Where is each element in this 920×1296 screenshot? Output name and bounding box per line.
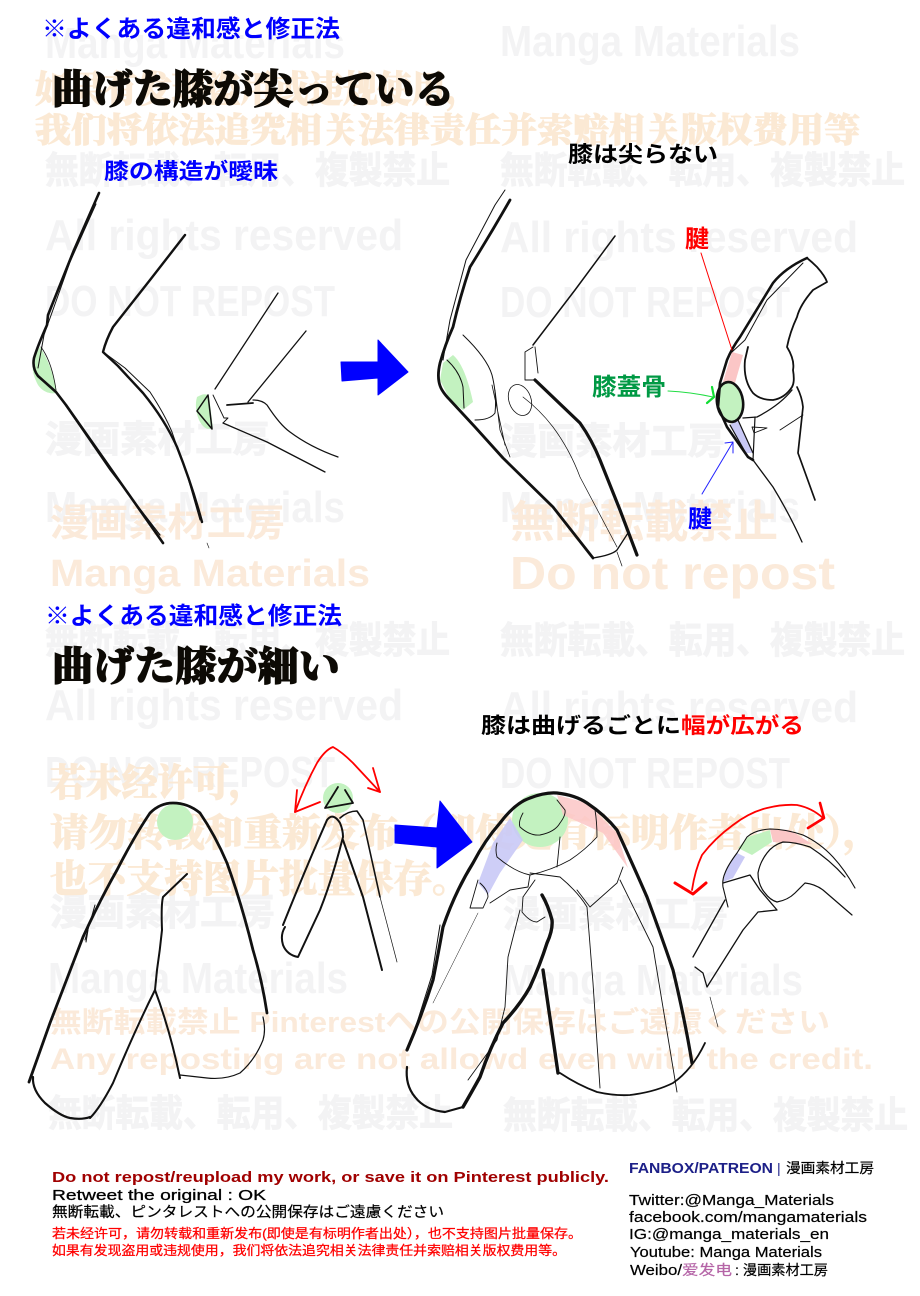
outer contour: [407, 793, 705, 1112]
caption: knee structure vague: 膝の構造が曖昧: [104, 159, 278, 184]
footer: social links: FANBOX/PATREON: [629, 1161, 773, 1177]
inner structure lines: [433, 800, 677, 1092]
footer: social links: |: [777, 1160, 781, 1176]
grey watermark text: 漫画素材工房: [50, 892, 275, 933]
grey watermark text: Manga Materials: [500, 483, 800, 532]
grey watermark text: 漫画素材工房: [500, 421, 725, 462]
tendon lower: [730, 420, 753, 453]
orange watermark text: Do not repost: [510, 547, 835, 599]
orange watermark text: 漫画素材工房: [50, 503, 285, 545]
grey watermark text: Manga Materials: [45, 19, 345, 68]
grey watermark text: All rights reserved: [500, 683, 858, 732]
label: tendon (red): 腱: [685, 226, 709, 253]
sketch: corrected wide knee: [407, 793, 705, 1112]
grey watermark text: Manga Materials: [48, 954, 348, 1003]
grey watermark text: All rights reserved: [45, 681, 403, 730]
sketch: thin bent knee structure: [282, 783, 397, 970]
highlight: tendon red: [557, 795, 628, 868]
caption: knee widens as it bends: 膝は曲げるごとに: [481, 713, 681, 738]
grey watermark text: 無断転載、転用、複製禁止: [48, 1093, 453, 1134]
orange watermark text: 我们将依法追究相关法律责任并索赔相关版权费用等: [35, 112, 860, 150]
orange watermark text: 也不支持图片批量保存。: [50, 859, 470, 901]
footer: repost notice: Do not repost/reupload my work, or save it on Pinterest publicly.: [52, 1169, 609, 1186]
section 2 title: 曲げた膝が細い: [52, 635, 340, 692]
footer: social links: 漫画素材工房: [786, 1160, 874, 1176]
sketch: corrected knee side anatomy: [693, 829, 855, 1027]
grey watermark text: Manga Materials: [500, 17, 800, 66]
sketch: thin bent knee outline: [29, 803, 267, 1119]
grey watermark text: DO NOT REPOST: [45, 277, 335, 326]
label: tendon (blue): 腱: [688, 506, 712, 533]
sketch: corrected knee: [438, 190, 637, 566]
section 1 label: ※よくある違和感と修正法: [42, 16, 340, 43]
footer: social links: facebook.com/mangamaterials: [629, 1209, 867, 1226]
footer: repost notice: 如果有发现盗用或违规使用，我们将依法追究相关法律责任并索赔相关版权费用等。: [52, 1243, 566, 1258]
footer: repost notice: 若未经许可，请勿转载和重新发布(即使是有标明作者出处），也不支持图片批量保存。: [52, 1226, 582, 1241]
orange watermark text: 若未经许可，: [50, 763, 265, 806]
sketch: pointed knee front outline: [33, 193, 163, 543]
arrow: red double curved 1: [295, 747, 380, 812]
orange watermark text: 無断転載禁止: [510, 498, 778, 547]
grey watermark text: Manga Materials: [503, 956, 803, 1005]
caption: knee widens as it bends: [481, 713, 804, 738]
orange watermark text: Any reposting are not allowd even with the credit.: [50, 1043, 873, 1076]
grey watermark text: 漫画素材工房: [503, 894, 728, 935]
label: kneecap (green): 膝蓋骨: [592, 374, 666, 401]
grey watermark text: 漫画素材工房: [45, 419, 270, 460]
footer: social links: : 漫画素材工房: [735, 1262, 828, 1278]
orange watermark text: 無断転載禁止 Pinterestへの公開保存はご遠慮ください: [50, 1005, 830, 1039]
orange watermark text: Manga Materials: [50, 553, 370, 595]
sketch: pointed knee second outline: [103, 235, 209, 548]
tendon upper: [723, 352, 743, 383]
orange watermark text: 请勿转载和重新发布（即使是有标明作者出处），: [50, 813, 882, 856]
grey watermark text: Manga Materials: [45, 483, 345, 532]
highlight: kneecap green: [512, 793, 568, 847]
kneecap: [714, 380, 746, 424]
highlight: tendon blue: [478, 818, 523, 895]
footer: social links: Weibo/: [630, 1262, 683, 1279]
bone outlines: [718, 258, 827, 542]
orange watermark text: 如果有发现盗用或违规使用，: [35, 69, 480, 111]
arrow: blue right 1: [341, 340, 408, 395]
footer: repost notice: Retweet the original : OK: [52, 1187, 266, 1204]
section 1 title: 曲げた膝が尖っている: [52, 58, 455, 115]
footer: social links: Twitter:@Manga_Materials: [629, 1192, 834, 1209]
grey watermark text: All rights reserved: [500, 213, 858, 262]
label: tendon (red): [685, 226, 732, 350]
orange watermark text: [35, 69, 882, 1076]
arrow: blue right 2: [395, 801, 472, 868]
footer: social links: 爱发电: [682, 1262, 732, 1278]
grey watermark text: DO NOT REPOST: [45, 748, 335, 797]
footer: social links: Youtube: Manga Materials: [630, 1244, 822, 1261]
caption: knee is not pointed: 膝は尖らない: [568, 142, 718, 167]
sketch: knee side anatomy: [714, 258, 827, 542]
grey watermark text: DO NOT REPOST: [500, 749, 790, 798]
grey watermark text: DO NOT REPOST: [500, 278, 790, 327]
sketch: pointed knee skeletal structure: [196, 293, 338, 472]
label: tendon (blue): [688, 442, 733, 533]
grey watermark text: All rights reserved: [45, 211, 403, 260]
footer: social links: [629, 1160, 874, 1279]
section 2 label: ※よくある違和感と修正法: [45, 603, 342, 630]
footer: repost notice: 無断転載、ピンタレストへの公開保存はご遠慮ください: [52, 1204, 444, 1221]
label: kneecap (green): [592, 374, 714, 403]
grey watermark text: 無断転載、転用、複製禁止: [45, 620, 450, 661]
footer: social links: IG:@manga_materials_en: [629, 1226, 829, 1243]
grey watermark text: 無断転載、転用、複製禁止: [45, 150, 450, 191]
arrow: red double curved 2: [675, 803, 824, 894]
caption: knee widens as it bends: 幅が広がる: [681, 713, 804, 738]
footer: repost notice: [52, 1169, 609, 1258]
